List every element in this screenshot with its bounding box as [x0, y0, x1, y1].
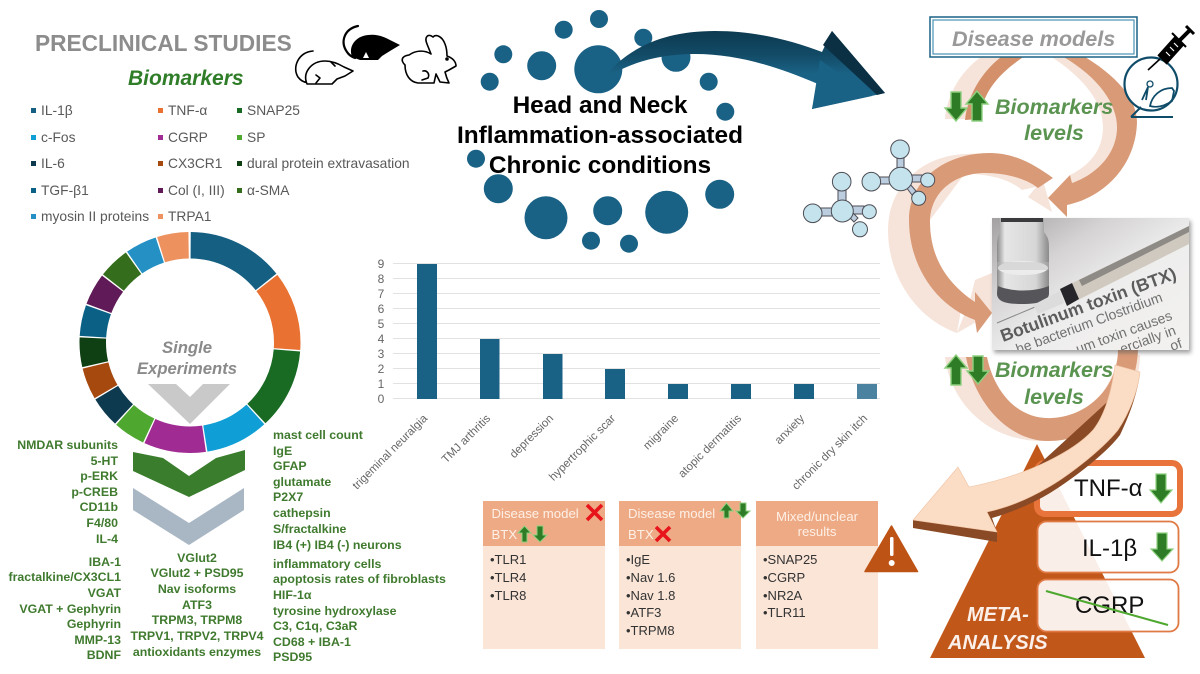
- icons: laboratory animals: [296, 26, 456, 84]
- label: meta-analysis: [947, 604, 1048, 654]
- icon: red cross: [587, 505, 602, 520]
- icon: down and up arrows: [945, 91, 988, 121]
- legend: biomarkers: TNF-α: [168, 103, 207, 118]
- list: right lower biomarkers: [273, 557, 446, 664]
- list: left upper biomarkers: [17, 438, 118, 546]
- bar chart: disease model counts: 9: [378, 257, 385, 271]
- list: right lower biomarkers: inflammatory cells: [273, 557, 382, 571]
- photo caption text: Botulinum toxin (BTX): [998, 263, 1179, 346]
- list: left lower biomarkers: VGAT + Gephyrin: [19, 602, 121, 616]
- icon: up and down arrows: [720, 503, 750, 518]
- list: right upper biomarkers: IB4 (+) IB4 (-) neurons: [273, 538, 402, 552]
- legend: biomarkers: Col (I, III): [168, 183, 225, 198]
- icon: warning triangle: [865, 526, 918, 572]
- list: middle biomarkers: TRPM3, TRPM8: [152, 613, 242, 627]
- bar chart: disease model counts: atopic dermatitis: [676, 412, 744, 480]
- cycle arrow: bottom swirl: [945, 350, 1140, 441]
- shape: meta-analysis triangle: [930, 444, 1145, 658]
- list: right upper biomarkers: cathepsin: [273, 506, 331, 520]
- list: middle biomarkers: Nav isoforms: [158, 582, 236, 596]
- label: biomarkers levels upper: Biomarkers: [995, 95, 1113, 119]
- title: preclinical studies: PRECLINICAL STUDIES: [35, 30, 292, 56]
- icon: up and down arrows: [945, 355, 989, 385]
- list: middle biomarkers: ATF3: [182, 598, 212, 612]
- card: disease model changes, BTX unchanged: •TRPM8: [626, 623, 675, 638]
- photo caption text: ercially in: [1118, 322, 1178, 357]
- list: left lower biomarkers: MMP-13: [74, 633, 121, 647]
- bar chart: disease model counts: 3: [378, 347, 385, 361]
- donut chart: biomarker share: [93, 245, 287, 440]
- legend: biomarkers: IL-6: [41, 156, 65, 171]
- box: IL-1beta: IL-1β: [1082, 535, 1137, 562]
- icon: down arrow: [1150, 474, 1172, 503]
- card: disease model changes, BTX unchanged: •ATF3: [626, 605, 661, 620]
- list: right upper biomarkers: mast cell count: [273, 428, 363, 442]
- box: disease models: Disease models: [952, 26, 1115, 51]
- label: biomarkers levels lower: Biomarkers: [995, 358, 1113, 382]
- icon: white rabbit: [402, 35, 456, 83]
- card: disease model changes, BTX unchanged: BTX: [628, 527, 654, 542]
- card: disease model unchanged, BTX changes: •TLR4: [490, 570, 526, 585]
- label: biomarkers levels lower: [945, 355, 1113, 409]
- bar chart: disease model counts: 6: [378, 302, 385, 316]
- decorative circles: cluster: [467, 10, 734, 253]
- list: right lower biomarkers: tyrosine hydroxylase: [273, 604, 397, 618]
- label: meta-analysis: ANALYSIS: [947, 632, 1048, 654]
- icon: down arrow: [1151, 533, 1173, 561]
- vial: [997, 218, 1049, 304]
- legend: biomarkers: TRPA1: [168, 209, 211, 224]
- bar chart: disease model counts: TMJ arthritis: [440, 412, 493, 466]
- list: right lower biomarkers: HIF-1α: [273, 588, 312, 602]
- title: head and neck conditions: Head and Neck: [513, 92, 688, 119]
- card: disease model unchanged, BTX changes: •TLR1: [490, 552, 526, 567]
- card: disease model changes, BTX unchanged: •IgE: [626, 552, 650, 567]
- card: disease model changes, BTX unchanged: •Nav 1.8: [626, 588, 675, 603]
- list: left upper biomarkers: NMDAR subunits: [17, 438, 118, 452]
- syringe: [997, 226, 1189, 323]
- bar chart: disease model counts: anxiety: [773, 412, 807, 447]
- bar chart: disease model counts: 5: [378, 317, 385, 331]
- label: single experiments: Single: [162, 338, 212, 357]
- card: mixed or unclear results: Mixed/unclear: [776, 509, 859, 524]
- bar chart: disease model counts: migraine: [641, 413, 681, 452]
- list: right lower biomarkers: CD68 + IBA-1: [273, 635, 351, 649]
- photo caption text: he bacterium Clostridium: [1014, 289, 1165, 357]
- list: left upper biomarkers: 5-HT: [91, 454, 118, 468]
- card: disease model changes, BTX unchanged: Disease model: [628, 506, 715, 521]
- legend: biomarkers: [31, 103, 410, 224]
- list: middle biomarkers: antioxidants enzymes: [133, 645, 261, 659]
- list: left lower biomarkers: VGAT: [88, 586, 121, 600]
- card: mixed or unclear results: •TLR11: [763, 605, 806, 620]
- list: right lower biomarkers: apoptosis rates of fibroblasts: [273, 572, 446, 586]
- list: right upper biomarkers: S/fractalkine: [273, 522, 347, 536]
- legend: biomarkers: IL-1β: [41, 103, 73, 118]
- card: disease model changes, BTX unchanged: •Nav 1.6: [626, 570, 675, 585]
- box: disease models: [930, 17, 1137, 57]
- list: right upper biomarkers: [273, 428, 402, 552]
- heading: biomarkers: Biomarkers: [128, 67, 244, 90]
- icon: red cross: [656, 527, 670, 541]
- chevron: green: [133, 450, 245, 497]
- bar chart: disease model counts: 1: [378, 377, 385, 391]
- box: CGRP: CGRP: [1075, 592, 1144, 619]
- box: TNF-alpha: TNF-α: [1074, 475, 1143, 502]
- icon: up and down arrows: [518, 526, 547, 542]
- card: disease model unchanged, BTX changes: [483, 501, 605, 649]
- list: right lower biomarkers: PSD95: [273, 650, 312, 664]
- list: right upper biomarkers: IgE: [273, 444, 292, 458]
- icon: syringe and rodent wheel: [1124, 26, 1194, 117]
- bar chart: disease model counts: depression: [508, 413, 556, 461]
- list: left upper biomarkers: p-CREB: [71, 485, 118, 499]
- card: mixed or unclear results: results: [798, 524, 837, 539]
- arrow: curved blue: [602, 31, 885, 109]
- legend: biomarkers: α-SMA: [247, 183, 290, 198]
- icon: molecule left: [803, 172, 876, 237]
- legend: biomarkers: SNAP25: [247, 103, 300, 118]
- title: head and neck conditions: Inflammation-associated: [457, 122, 743, 149]
- cycle arrow: top swirl: [945, 54, 1137, 217]
- list: middle biomarkers: VGlut2 + PSD95: [151, 566, 244, 580]
- bar chart: disease model counts: 0: [378, 392, 385, 406]
- card: mixed or unclear results: •CGRP: [763, 570, 805, 585]
- bar chart: disease model counts: hypertrophic scar: [547, 413, 618, 484]
- list: middle biomarkers: TRPV1, TRPV2, TRPV4: [130, 629, 264, 643]
- list: right upper biomarkers: P2X7: [273, 490, 303, 504]
- card: disease model unchanged, BTX changes: Disease model: [492, 506, 579, 521]
- legend: biomarkers: TGF-β1: [41, 183, 89, 198]
- card: mixed or unclear results: [756, 501, 878, 649]
- legend: biomarkers: dural protein extravasation: [247, 156, 410, 171]
- legend: biomarkers: SP: [247, 130, 265, 145]
- bar chart: disease model counts: 7: [378, 287, 385, 301]
- card: disease model unchanged, BTX changes: •TLR8: [490, 588, 526, 603]
- card: disease model unchanged, BTX changes: BTX: [492, 527, 517, 542]
- legend: biomarkers: myosin II proteins: [41, 209, 149, 224]
- list: left lower biomarkers: [8, 555, 121, 662]
- icon: black rat: [344, 26, 400, 60]
- chevron: grey: [148, 384, 230, 424]
- arrow: peach pointing to results: [913, 365, 1140, 542]
- icon: white mouse: [296, 51, 353, 84]
- bar chart: disease model counts: 2: [378, 362, 385, 376]
- card: disease model changes, BTX unchanged: [619, 501, 750, 649]
- box: IL-1beta: [1038, 522, 1178, 572]
- list: left lower biomarkers: BDNF: [87, 648, 121, 662]
- bar chart: disease model counts: chronic dry skin itch: [790, 413, 870, 493]
- list: left upper biomarkers: F4/80: [86, 516, 118, 530]
- card: mixed or unclear results: •NR2A: [763, 588, 803, 603]
- legend: biomarkers: CX3CR1: [168, 156, 222, 171]
- list: left lower biomarkers: IBA-1: [89, 555, 121, 569]
- title: head and neck conditions: Chronic conditions: [489, 152, 711, 179]
- bar chart: disease model counts: 4: [378, 332, 385, 346]
- cycle arrow: middle swirl: [888, 153, 1053, 333]
- label: single experiments: Experiments: [137, 359, 237, 378]
- list: right upper biomarkers: glutamate: [273, 475, 331, 489]
- label: biomarkers levels lower: levels: [1024, 385, 1084, 409]
- legend: biomarkers: CGRP: [168, 130, 208, 145]
- card: mixed or unclear results: •SNAP25: [763, 552, 817, 567]
- box: CGRP: [1038, 580, 1178, 632]
- list: right lower biomarkers: C3, C1q, C3aR: [273, 619, 357, 633]
- icon: molecule right: [862, 140, 935, 205]
- photo caption text: um toxin causes: [1074, 307, 1174, 357]
- label: biomarkers levels upper: levels: [1024, 121, 1084, 145]
- list: middle biomarkers: [130, 551, 264, 659]
- box: TNF-alpha: [1037, 463, 1180, 514]
- list: right upper biomarkers: GFAP: [273, 459, 307, 473]
- list: left upper biomarkers: IL-4: [96, 532, 118, 546]
- bar chart: disease model counts: [351, 257, 880, 493]
- chevron: slate: [133, 488, 244, 545]
- bar chart: disease model counts: 8: [378, 272, 385, 286]
- list: left upper biomarkers: CD11b: [80, 500, 118, 514]
- label: meta-analysis: META-: [967, 604, 1029, 626]
- bar chart: disease model counts: trigeminal neuralgia: [351, 412, 431, 492]
- photo: botulinum toxin vial and syringe: [992, 218, 1191, 357]
- icon: syringe: [1148, 26, 1194, 70]
- photo caption text: of: [1168, 335, 1184, 354]
- title: head and neck conditions: [457, 92, 743, 179]
- label: single experiments: [137, 338, 237, 378]
- list: left upper biomarkers: p-ERK: [80, 469, 118, 483]
- list: left lower biomarkers: fractalkine/CX3CL1: [8, 570, 121, 584]
- list: middle biomarkers: VGlut2: [177, 551, 217, 565]
- legend: biomarkers: c-Fos: [41, 130, 76, 145]
- list: left lower biomarkers: Gephyrin: [67, 617, 121, 631]
- label: biomarkers levels upper: [945, 91, 1113, 145]
